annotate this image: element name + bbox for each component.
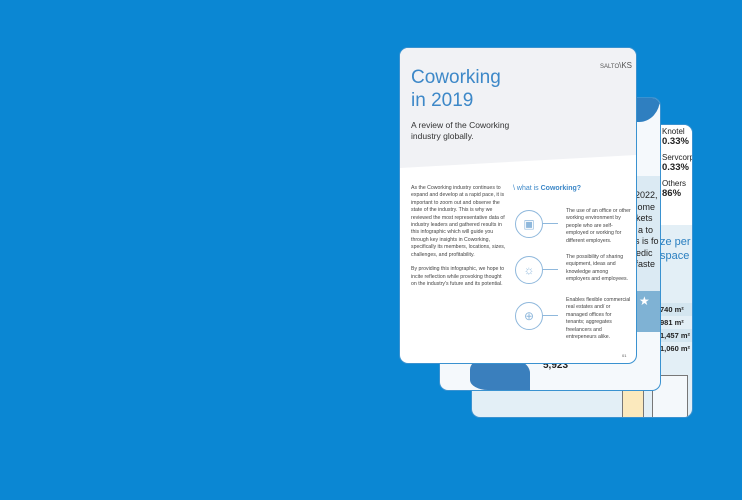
icon: lightbulb: ☼ — [524, 263, 534, 277]
subtitle — [411, 120, 509, 141]
text fragment: e faste — [628, 259, 655, 269]
stats list — [660, 125, 694, 225]
star block — [636, 291, 666, 332]
icon: lightbulb — [515, 256, 543, 284]
title — [411, 67, 501, 111]
item 2 — [515, 254, 628, 284]
middle page — [440, 98, 660, 390]
stats list: Others — [662, 179, 686, 188]
intro text: As the Coworking industry continues to expand and develop at a rapid pace, it is important to zoom out and observe the state of the industry. This is why we reviewed the most representative data of industry leaders and gathered results in this infographic which will guide you through key insights in Coworking, specifically its members, locations, sizes, challenges, and profitability. — [411, 185, 505, 258]
size values: 981 m² — [660, 318, 684, 327]
text fragment: arkets — [628, 213, 653, 223]
icon: office: ▣ — [523, 217, 535, 231]
size values: 740 m² — [660, 305, 684, 314]
front page — [400, 48, 636, 363]
title: Coworking — [411, 67, 501, 88]
text fragment: his is fo — [628, 236, 659, 246]
map UK — [470, 356, 530, 390]
icon: office — [515, 210, 543, 238]
subtitle: A review of the Coworking — [411, 120, 509, 130]
size values — [660, 303, 692, 353]
item 3: Enables flexible commercial real estates and/ or managed offices for tenants; aggregates freelancers and entrepeneurs alike. — [566, 297, 630, 340]
size heading — [660, 236, 691, 262]
text fragment: y 2022, — [628, 190, 658, 200]
size values: 1,457 m² — [660, 331, 690, 340]
stats list: 0.33% — [662, 162, 689, 173]
buildings illustration — [622, 375, 644, 419]
item 1: The use of an office or other working environment by people who are self-employed or working for different employers. — [566, 208, 631, 244]
icon: head — [515, 302, 543, 330]
item 1 — [515, 208, 631, 244]
section heading: \ what is Coworking? — [513, 185, 581, 192]
text fragment — [628, 190, 659, 269]
size heading: space — [660, 250, 689, 262]
globe — [618, 76, 660, 122]
text fragment: ecome — [628, 202, 655, 212]
item 3 — [515, 297, 630, 340]
stats list: Knotel — [662, 127, 685, 136]
text fragment: th a to — [628, 224, 653, 234]
title: in 2019 — [411, 90, 473, 111]
stats list: 86% — [662, 188, 681, 199]
text fragment: predic — [628, 248, 653, 258]
back page — [472, 125, 692, 417]
number: 5,923 — [543, 360, 568, 371]
size values: 1,060 m² — [660, 344, 690, 353]
page number: 01 — [622, 353, 626, 358]
logo: SALTO\KS — [600, 61, 632, 70]
icon: head: ⊕ — [524, 309, 534, 323]
stats list: 0.33% — [662, 136, 689, 147]
item 2: The possibility of sharing equipment, ideas and knowledge among employers and employees. — [566, 254, 628, 282]
header bg — [400, 48, 636, 168]
size heading: ze per — [660, 236, 691, 248]
star block: ★ — [639, 294, 650, 308]
intro text: By providing this infographic, we hope to incite reflection while provoking thought on the industry's future and its potential. — [411, 266, 504, 287]
subtitle: industry globally. — [411, 131, 474, 141]
banner — [440, 176, 660, 326]
